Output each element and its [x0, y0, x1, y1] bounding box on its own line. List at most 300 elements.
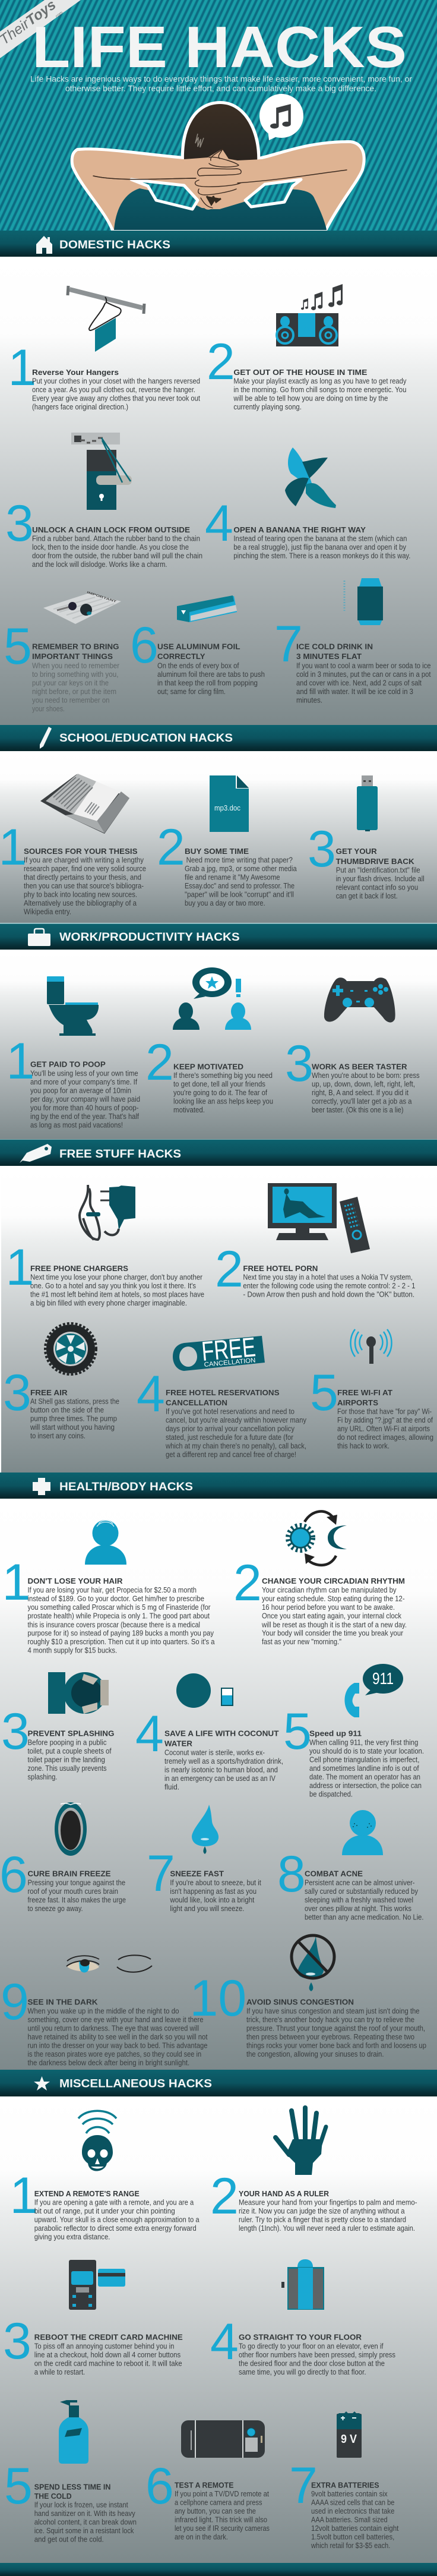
- body text: Find a rubber band. Attach the rubber band to the chain: [32, 535, 200, 543]
- icon: hanger: [68, 286, 144, 352]
- body text: toilet, put a couple sheets of: [27, 1747, 112, 1755]
- body text: any button, you can see the: [175, 2507, 256, 2515]
- body text: beer taster. (Ok this one is a lie): [312, 1106, 404, 1114]
- icon: 9V battery: 9 V: [341, 2433, 357, 2446]
- number 5: 5: [310, 1364, 338, 1421]
- heading: miscellaneous hacks: MISCELLANEOUS HACKS: [59, 2078, 212, 2091]
- body text: pump three times. The pump: [30, 1415, 117, 1423]
- body text: [261, 1586, 407, 1646]
- icon: open mouth: [55, 1802, 87, 1856]
- body text: [185, 856, 297, 907]
- body text: which at my chain there's no penalty), call back,: [165, 1442, 306, 1450]
- icon: elevator: [281, 2259, 324, 2310]
- hack: save a life with coconut water: [135, 1673, 283, 1791]
- icon: tire: [45, 1323, 96, 1374]
- body text: enter the following code using the remote control: 2 - 2 - 1: [243, 1282, 415, 1290]
- body text: instead of $189. Go to your doctor. Get him/her to prescribe: [27, 1595, 204, 1603]
- icon: prohibited nose: [292, 1935, 334, 1991]
- body text: [30, 1273, 204, 1307]
- body text: cancel, but you're already within however many: [166, 1416, 307, 1424]
- illustration: relaxed person: [74, 104, 363, 230]
- heading: [337, 1389, 392, 1407]
- body text: this is insurance covers proscar (because there is a medical: [27, 1620, 200, 1629]
- body text: [239, 2342, 395, 2376]
- body text: your eating schedule. Stop eating during the 12-: [262, 1595, 405, 1603]
- section banner: school/education hacks: [0, 725, 437, 751]
- section banner: miscellaneous hacks: [0, 2070, 437, 2096]
- body text: light and you will sneeze.: [170, 1905, 244, 1913]
- icon: hand: [276, 2108, 326, 2175]
- section banner: domestic hacks: [0, 231, 437, 257]
- icon: mp3.doc file: [210, 775, 249, 832]
- body text: - Down Arrow then push and hold down the "OK" button.: [243, 1290, 414, 1298]
- body text: you for more than 40 hours of poop-: [30, 1104, 139, 1112]
- body text: can get it back if lost.: [336, 892, 398, 900]
- body text: let you see if IR security cameras: [175, 2524, 270, 2533]
- heading: SNEEZE FAST: [170, 1870, 224, 1878]
- body text: over ones pillow at night. This works: [305, 1905, 411, 1913]
- body text: Every year give away any clothes that you never took out: [32, 395, 200, 403]
- number 7: 7: [274, 616, 303, 673]
- icon: card machine: [69, 2260, 125, 2310]
- heading: CURE BRAIN FREEZE: [27, 1870, 110, 1878]
- body text: per day, your company will have paid: [30, 1095, 140, 1103]
- heading: EXTRA BATTERIES: [311, 2482, 379, 2490]
- body text: the desired floor and the door close button at the: [239, 2359, 385, 2367]
- body text: up, up, down, down, left, right, left,: [312, 1080, 415, 1089]
- body text: (hangers face original direction.): [32, 403, 128, 411]
- heading: GET PAID TO POOP: [30, 1060, 106, 1068]
- body text: door from the outside, the rubber band will pull the chain: [32, 552, 202, 560]
- hack: your hand as a ruler: [210, 2108, 417, 2233]
- body text: [27, 1879, 126, 1913]
- number 5: 5: [4, 2458, 33, 2515]
- body text: Wikipedia entry.: [24, 908, 71, 916]
- icon: free cancellation tag: CANCELLATION: [204, 1357, 256, 1369]
- body text: AAA batteries. Small sized: [311, 2516, 388, 2524]
- body text: Persistent acne can be almost univer-: [305, 1879, 414, 1887]
- body text: date. The moment an operator has an: [309, 1773, 420, 1782]
- body text: something, cover one eye with your hand and leave it there: [27, 2016, 204, 2024]
- heading: AVOID SINUS CONGESTION: [246, 1998, 354, 2006]
- body text: minutes.: [296, 696, 322, 704]
- body text: [30, 1398, 119, 1440]
- body text: as long as most paid vacations!: [30, 1121, 123, 1130]
- icon: star: [34, 2076, 50, 2091]
- body text: If your lock is frozen, use instant: [34, 2501, 128, 2509]
- icon: cellphone: [181, 2420, 265, 2458]
- number 4: 4: [210, 2313, 239, 2370]
- heading: COMBAT ACNE: [305, 1870, 363, 1878]
- icon: skull with signal: [78, 2111, 116, 2171]
- body text: in an emergency can be used as an IV: [164, 1774, 276, 1783]
- icon: house: [36, 236, 52, 254]
- body text: days prior to arrival your cancellation policy: [166, 1424, 295, 1433]
- number 1: 1: [6, 1239, 34, 1296]
- heading: FREE HOTEL PORN: [243, 1265, 318, 1273]
- number 6: 6: [130, 617, 159, 674]
- intro text: [30, 75, 413, 93]
- hero header: [0, 0, 437, 231]
- body text: button on the side of the: [30, 1406, 104, 1414]
- heading: USE ALUMINUM FOIL: [157, 643, 240, 651]
- body text: [27, 2007, 208, 2067]
- body text: then press between your eyebrows. Repeating these two: [246, 2033, 414, 2041]
- icon: keys on paper: IMPORTANT: [86, 591, 117, 604]
- number 2: 2: [157, 819, 185, 876]
- body text: lock, then to the inside door handle. As you close the: [32, 543, 189, 551]
- hack: spend less time in the cold: [4, 2400, 137, 2543]
- icon: wifi antenna: [350, 1329, 392, 1364]
- body text: bit out of range, put it under your chin pointing: [34, 2207, 175, 2215]
- heading: Speed up 911: [309, 1730, 362, 1738]
- icon: two people with speech bubble: [173, 967, 251, 1030]
- heading: IMPORTANT THINGS: [32, 652, 113, 661]
- number 1: 1: [6, 1033, 34, 1090]
- body text: Next time you lose your phone charger, don't buy another: [30, 1273, 202, 1281]
- icon: sun and moon cycle: [288, 1511, 347, 1565]
- body text: [27, 1586, 215, 1654]
- body text: [165, 1407, 307, 1459]
- body text: If there's something big you need: [173, 1071, 273, 1080]
- heading: PREVENT SPLASHING: [27, 1730, 114, 1738]
- body text: [27, 1739, 112, 1782]
- number 3: 3: [1, 1703, 30, 1760]
- body text: a cellphone camera and press: [175, 2498, 262, 2506]
- body text: rize it. Now you can judge the size of anything without a: [239, 2207, 405, 2215]
- panel: work/productivity hacks: [0, 951, 437, 1140]
- heading: GET YOUR: [336, 847, 377, 856]
- hack: sources for your thesis: [0, 774, 146, 916]
- hack: use aluminum foil correctly: [130, 595, 265, 696]
- body text: until you return to darkness. The eye that was covered will: [27, 2024, 199, 2032]
- number 2: 2: [210, 2168, 239, 2225]
- hack: unlock a chain lock: [5, 433, 202, 569]
- number 1: 1: [8, 339, 36, 396]
- body text: If you point a TV/DVD remote at: [175, 2490, 269, 2498]
- hack: see in the dark: [1, 1955, 208, 2067]
- body text: and sometimes landline info is out of: [309, 1764, 419, 1773]
- icon: free cancellation tag: [173, 1331, 265, 1371]
- body text: currently playing song.: [233, 403, 302, 411]
- icon: nose with drop: [192, 1805, 218, 1854]
- heading: free stuff hacks: FREE STUFF HACKS: [59, 1148, 181, 1161]
- heading: CHANGE YOUR CIRCADIAN RHYTHM: [262, 1577, 405, 1585]
- heading: SOURCES FOR YOUR THESIS: [24, 847, 138, 856]
- body text: out; same for cling film.: [157, 688, 226, 696]
- heading: [164, 1730, 279, 1748]
- body text: in that keep the roll from popping: [157, 679, 258, 687]
- body text: a big bin filled with every phone charger imaginable.: [30, 1299, 187, 1307]
- body text: [246, 2007, 426, 2058]
- number 3: 3: [5, 495, 34, 552]
- body text: and the lock will dislodge. Works like a charm.: [32, 560, 167, 569]
- body text: Essay.doc" and send to professor. The: [185, 882, 294, 890]
- body text: file and rename it "My Awesome: [185, 874, 280, 882]
- body text: the congestion, allowing your sinuses to drain.: [246, 2050, 384, 2058]
- body text: other floor numbers have been pressed, simply press: [239, 2351, 395, 2359]
- number 2: 2: [233, 1555, 262, 1612]
- heading: THE COLD: [34, 2492, 72, 2501]
- number 8: 8: [277, 1846, 306, 1903]
- number 6: 6: [145, 2458, 174, 2515]
- body text: [239, 2199, 417, 2233]
- body text: When you wake up in the middle of the night to do: [27, 2007, 179, 2015]
- body text: Pressing your tongue against the: [27, 1879, 125, 1887]
- hack: reboot the credit card machine: [3, 2260, 183, 2376]
- body text: pinching the stem. There is a reason monkeys do it this way.: [233, 552, 410, 560]
- body text: your shoes.: [32, 705, 65, 713]
- body text: Put your clothes in your closet with the hangers reversed: [32, 377, 200, 385]
- heading: UNLOCK A CHAIN LOCK FROM OUTSIDE: [32, 526, 190, 534]
- body text: tremely well as a sports/hydration drink,: [164, 1757, 283, 1765]
- heading: [34, 2483, 110, 2501]
- body text: Once you start eating again, your internal clock: [262, 1612, 402, 1620]
- body text: get a different rep and cancel free of charge!: [166, 1451, 296, 1459]
- body text: you need to remember on: [32, 696, 110, 704]
- body text: Make your playlist exactly as long as you have to get ready: [233, 377, 407, 385]
- heading: KEEP MOTIVATED: [173, 1062, 243, 1071]
- number 10: 10: [190, 1970, 246, 2027]
- body text: If you are losing your hair, get Propecia for $2.50 a month: [27, 1586, 197, 1594]
- icon: foil box: [177, 595, 237, 622]
- ribbon: TheirToys.com: .com: [54, 11, 64, 20]
- body text: [169, 1879, 261, 1913]
- body text: zone. This usually prevents: [27, 1764, 107, 1773]
- icon: phone with 911 bubble: [344, 1664, 403, 1717]
- body text: you poop for an average of 10min: [30, 1087, 131, 1095]
- body text: would like, look into a bright: [169, 1896, 255, 1905]
- number 7: 7: [147, 1845, 175, 1902]
- panel: school/education hacks: [0, 752, 437, 923]
- hack: extra batteries: [289, 2411, 399, 2550]
- number 5: 5: [4, 618, 32, 675]
- heading: work/productivity hacks: WORK/PRODUCTIVITY HACKS: [59, 931, 240, 944]
- body text: [32, 661, 119, 713]
- body text: splashing.: [27, 1773, 57, 1782]
- body text: roughly $10 a prescription. Then cut it up into quarters. So it's a: [27, 1638, 215, 1646]
- heading: GET OUT OF THE HOUSE IN TIME: [233, 368, 367, 377]
- body text: fluid.: [164, 1783, 179, 1791]
- number 4: 4: [135, 1705, 164, 1762]
- body text: you should do is to state your location.: [309, 1747, 424, 1755]
- icon: open and closed eyes: [66, 1955, 152, 1973]
- body text: giving you extra distance.: [34, 2233, 110, 2241]
- body text: research paper, find one very solid source: [24, 865, 146, 873]
- number 4: 4: [205, 495, 233, 552]
- hack: open a banana: [205, 447, 410, 560]
- heading: FREE PHONE CHARGERS: [30, 1265, 128, 1273]
- body text: Your circadian rhythm can be manipulated by: [262, 1586, 397, 1594]
- icon: hand sanitizer: [59, 2400, 88, 2464]
- heading: [336, 847, 414, 866]
- body text: [157, 661, 265, 696]
- body text: Cell phone triangulation is imperfect,: [309, 1756, 419, 1764]
- body text: [24, 856, 146, 916]
- heading: BUY SOME TIME: [185, 847, 249, 856]
- body text: upward. Your skull is a close enough approximation to a: [34, 2216, 200, 2224]
- heading: OPEN A BANANA THE RIGHT WAY: [233, 526, 366, 534]
- hack: speed up 911: [283, 1664, 424, 1799]
- footer band: [0, 2563, 437, 2576]
- heading: THUMBDRIVE BACK: [336, 857, 414, 866]
- heading: WATER: [164, 1739, 192, 1748]
- body text: the #1 most left behind item at hotels, so most places have: [30, 1290, 204, 1298]
- number 7: 7: [289, 2457, 318, 2514]
- body text: freeze fast. It also makes the urge: [27, 1896, 126, 1905]
- hack: test a remote: [145, 2420, 270, 2541]
- hack: change your circadian rhythm: [233, 1511, 407, 1646]
- icon: mp3.doc file: mp3.doc: [214, 803, 240, 812]
- heading: AIRPORTS: [337, 1399, 378, 1407]
- body text: to insert any coins.: [30, 1432, 86, 1440]
- body text: Grab a jpg, mp3, or some other media: [185, 865, 297, 873]
- body text: prostate health) while Propecia is only 1. The good part about: [27, 1612, 210, 1620]
- icon: phone charger: [80, 1185, 135, 1240]
- icon: briefcase: [28, 929, 50, 946]
- body text: once a year. As you pull clothes out, reverse the hanger.: [32, 386, 195, 394]
- icon: coconut and glass: [176, 1673, 233, 1708]
- body text: which retail for $3-$5 each.: [311, 2542, 390, 2550]
- body text: better than any acne medication. No Lie.: [305, 1913, 424, 1922]
- body text: 4 month supply for $15 bucks.: [27, 1646, 117, 1654]
- body text: you're going to do it. The fear of: [173, 1089, 267, 1097]
- body text: sleeping with a freshly washed towel: [305, 1896, 413, 1905]
- body text: run into the dresser on your way back to bed. This advantage: [27, 2041, 208, 2050]
- body text: infrared light. This trick will also: [175, 2516, 267, 2524]
- body text: roof of your mouth cures brain: [27, 1887, 118, 1896]
- heading: REBOOT THE CREDIT CARD MACHINE: [34, 2334, 183, 2342]
- body text: If you are opening a gate with a remote, and you are a: [34, 2199, 194, 2207]
- icon: free cancellation tag: FREE: [200, 1331, 257, 1367]
- heading: REMEMBER TO BRING: [32, 643, 119, 651]
- heading: school/education hacks: SCHOOL/EDUCATION HACKS: [59, 732, 233, 745]
- body text: toilet paper in the landing: [27, 1756, 105, 1764]
- body text: in your flash drives. Include all: [336, 875, 425, 883]
- body text: [311, 2490, 399, 2550]
- body text: be a real struggle), just flip the banana over and open it by: [233, 543, 407, 551]
- number 5: 5: [283, 1703, 312, 1760]
- body text: will start without you having: [30, 1423, 115, 1432]
- icon: usb drive: [357, 775, 378, 831]
- hack: free phone chargers: [6, 1185, 204, 1307]
- body text: relevant contact info so you: [336, 883, 418, 891]
- body text: Next time you stay in a hotel that uses a Nokia TV system,: [243, 1273, 413, 1281]
- heading: [296, 643, 373, 661]
- hack: go straight to your floor: [210, 2259, 395, 2376]
- body text: one. Go to a hotel and say you think you lost it there. It's: [30, 1282, 196, 1290]
- icon: pencil: [40, 727, 52, 749]
- body text: line at a checkout, hold down all 4 corner buttons: [34, 2351, 180, 2359]
- body text: parabolic reflector to direct some extra energy forward: [34, 2224, 197, 2233]
- number 6: 6: [0, 1846, 28, 1903]
- hack: free hotel porn: [215, 1183, 415, 1298]
- body text: phy to back into locating new sources.: [24, 891, 137, 899]
- body text: sally cured or substantially reduced by: [305, 1887, 419, 1896]
- body text: [34, 2199, 200, 2241]
- body text: address or intersection, the police can: [309, 1782, 422, 1790]
- number 2: 2: [145, 1034, 174, 1091]
- number 3: 3: [308, 821, 336, 878]
- icon: open book: [40, 774, 129, 834]
- panel: health/body hacks: [0, 1500, 437, 2070]
- number 9: 9: [1, 1973, 29, 2030]
- body text: 1.5volt button cell batteries,: [311, 2533, 394, 2541]
- panel: miscellaneous hacks: [0, 2096, 437, 2563]
- heading: SAVE A LIFE WITH COCONUT: [164, 1730, 279, 1738]
- icon: phone with 911 bubble: 911: [372, 1669, 394, 1688]
- hack: sneeze fast: [147, 1805, 261, 1913]
- heading: CANCELLATION: [166, 1399, 227, 1407]
- intro text: otherwise better. They require little effort, and can cumulatively make a big difference.: [65, 84, 376, 93]
- heading: SEE IN THE DARK: [27, 1998, 97, 2006]
- body text: have retained its ability to see well in the dark so you will not: [27, 2033, 208, 2041]
- body text: "paper" will be look "corrupt" and it'll: [185, 891, 294, 899]
- body text: [309, 1739, 424, 1799]
- body text: When you're about to be born: press: [312, 1071, 420, 1080]
- hack: keep motivated: [145, 967, 273, 1114]
- hack: ice cold drink: [274, 578, 431, 704]
- number 1: 1: [10, 2167, 38, 2224]
- icon: toilet: [47, 976, 99, 1036]
- body text: AAAA sized cells that can be: [311, 2498, 394, 2506]
- ribbon: TheirToys.com: [0, 0, 81, 58]
- hack: get out of the house in time: [207, 284, 407, 411]
- body text: is the reason pirates wore eye patches, so they could see in: [27, 2050, 201, 2058]
- heading: ICE COLD DRINK IN: [296, 643, 373, 651]
- body text: is nearly isotonic to human blood, and: [164, 1765, 278, 1774]
- body text: If you have sinus congestion and steam just isn't doing the: [246, 2007, 420, 2015]
- heading: WORK AS BEER TASTER: [312, 1062, 407, 1071]
- heading: 3 MINUTES FLAT: [296, 652, 362, 661]
- heading: [157, 643, 240, 661]
- hack: get your thumbdrive back: [308, 775, 425, 900]
- body text: [34, 2501, 137, 2543]
- heading: FREE WI-FI AT: [337, 1389, 392, 1397]
- body text: Need more time writing that paper?: [186, 856, 293, 865]
- hack: buy some time: [157, 775, 297, 907]
- body text: correctly, you'll later get a job as a: [312, 1097, 412, 1105]
- hack: combat acne: [277, 1810, 424, 1922]
- icon: game controller: [324, 978, 395, 1023]
- icon: door chain lock: [71, 433, 132, 510]
- section banner: work/productivity hacks: [0, 923, 437, 950]
- body text: same time, you will go directly to that floor.: [239, 2368, 366, 2376]
- body text: To piss off an annoying customer behind you in: [34, 2342, 174, 2350]
- body text: night before, or put the item: [32, 688, 116, 696]
- hack: free air: [3, 1323, 119, 1440]
- body text: At Shell gas stations, press the: [30, 1398, 119, 1406]
- body text: and get out of the cold.: [34, 2535, 104, 2543]
- body text: buy you a day or two more.: [185, 899, 265, 907]
- body text: trick, there's another body hack you can try to relieve the: [246, 2016, 414, 2024]
- body text: If you are charged with writing a lengthy: [24, 856, 144, 865]
- body text: 16 hour period before you want to be awake.: [262, 1603, 395, 1612]
- panel: free stuff hacks: [0, 1167, 437, 1473]
- heading: EXTEND A REMOTE'S RANGE: [34, 2190, 140, 2198]
- body text: If you're about to sneeze, but it: [170, 1879, 261, 1887]
- body text: alcohol content, it can break down: [34, 2518, 137, 2526]
- body text: hand sanitizer on it. With its heavy: [34, 2509, 135, 2518]
- number 1: 1: [2, 1554, 30, 1611]
- body text: Your body will consider the time you break your: [262, 1629, 403, 1638]
- heading: [166, 1389, 279, 1407]
- section banner: health/body hacks: [0, 1473, 437, 1499]
- body text: 9volt batteries contain six: [311, 2490, 388, 2498]
- body text: purpose for it) so instead of paying 189 bucks a month you pay: [27, 1629, 214, 1638]
- body text: to sneeze go away.: [27, 1905, 83, 1913]
- body text: [337, 1407, 433, 1450]
